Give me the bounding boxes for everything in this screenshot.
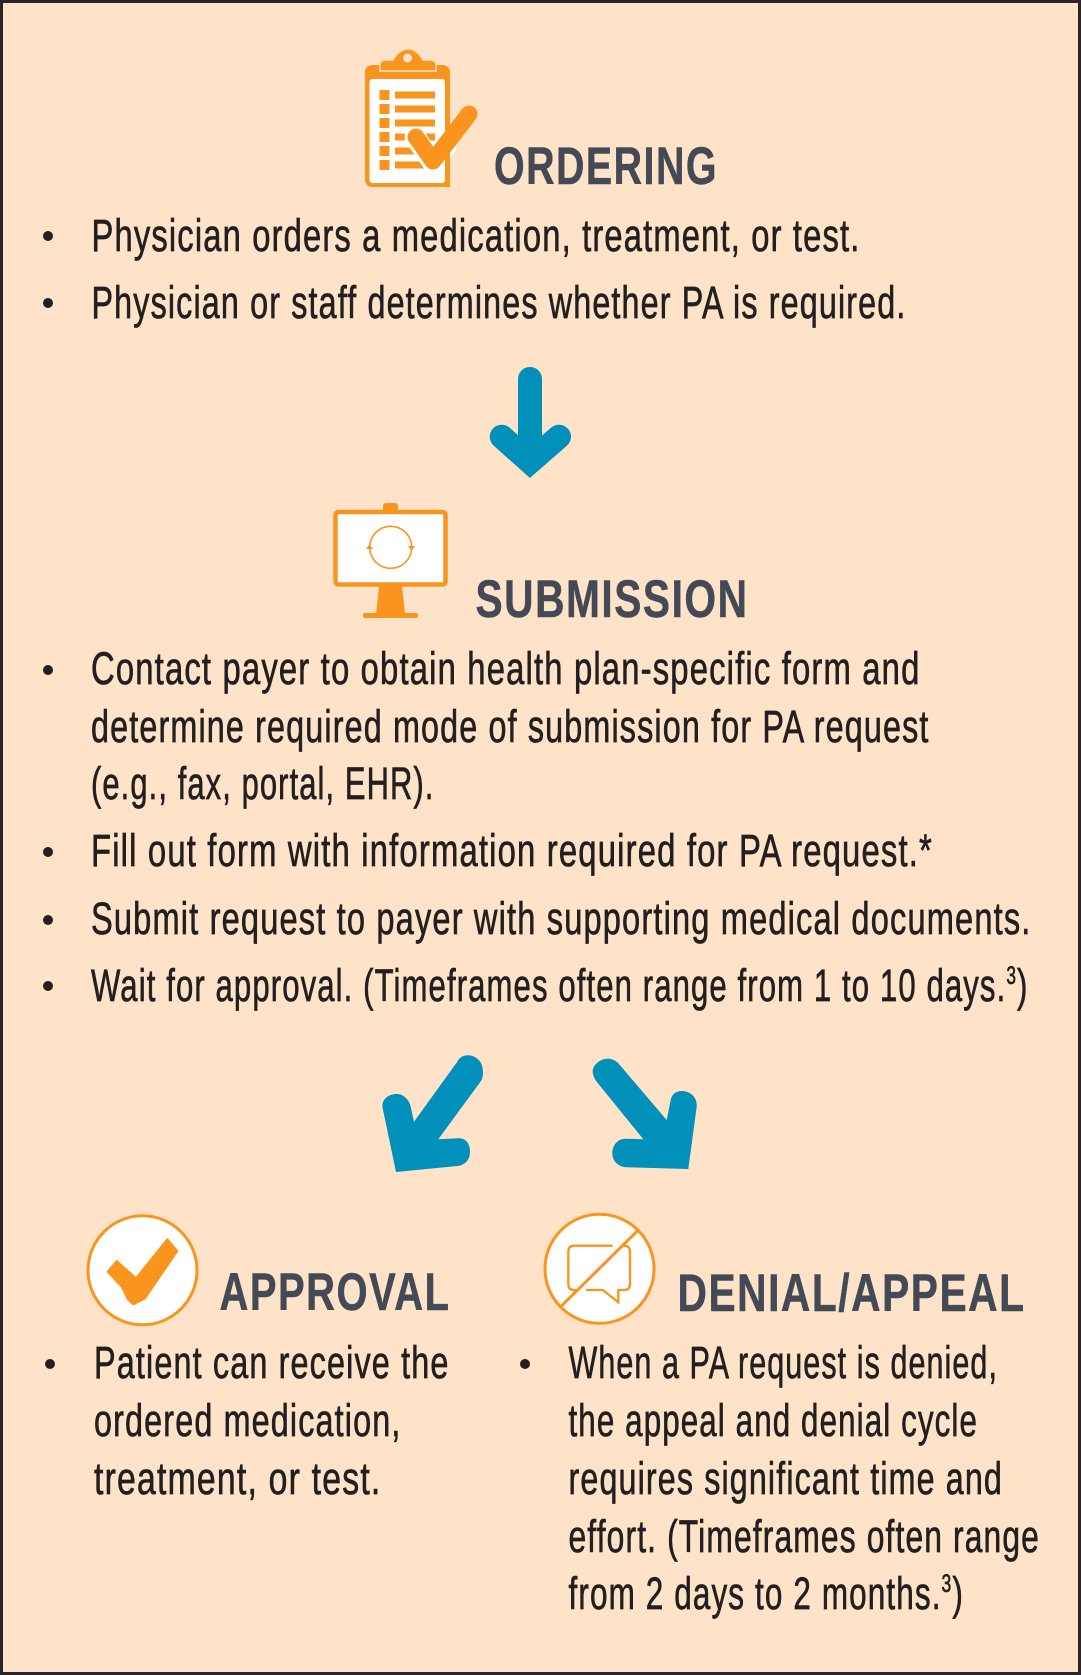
heading: submission: SUBMISSION	[476, 570, 748, 629]
bullet list: submission: 3	[1006, 962, 1017, 990]
heading: ordering: ORDERING	[494, 137, 718, 196]
heading: approval: APPROVAL	[220, 1263, 450, 1322]
icon: clipboard with checkmark	[365, 49, 469, 187]
bullet list: denial/appeal	[520, 1337, 1040, 1619]
bullet list: denial/appeal: )	[952, 1568, 964, 1619]
bullet list: submission: (e.g., fax, portal, EHR).	[91, 758, 434, 809]
section: ordering	[43, 49, 906, 328]
section: approval	[45, 1216, 450, 1504]
bullet list: approval: Patient can receive the	[94, 1337, 450, 1388]
arrow: down	[502, 379, 559, 462]
icon: monitor with refresh cycle	[336, 503, 446, 618]
bullet list: denial/appeal: 3	[942, 1570, 952, 1598]
bullet list: approval: ordered medication,	[94, 1395, 402, 1446]
bullet list: approval: treatment, or test.	[94, 1453, 382, 1504]
bullet list: ordering	[43, 210, 906, 328]
bullet list: submission: )	[1017, 960, 1028, 1011]
arrow: down-right to denial	[593, 1059, 697, 1169]
bullet list: approval	[45, 1337, 450, 1504]
bullet list: submission	[43, 643, 1032, 1011]
icon: crossed-out speech bubble in circle	[545, 1214, 654, 1323]
arrow: down-left to approval	[382, 1055, 483, 1172]
section: submission	[43, 503, 1032, 1011]
icon: check in circle	[88, 1216, 197, 1325]
section: denial/appeal	[520, 1214, 1040, 1619]
